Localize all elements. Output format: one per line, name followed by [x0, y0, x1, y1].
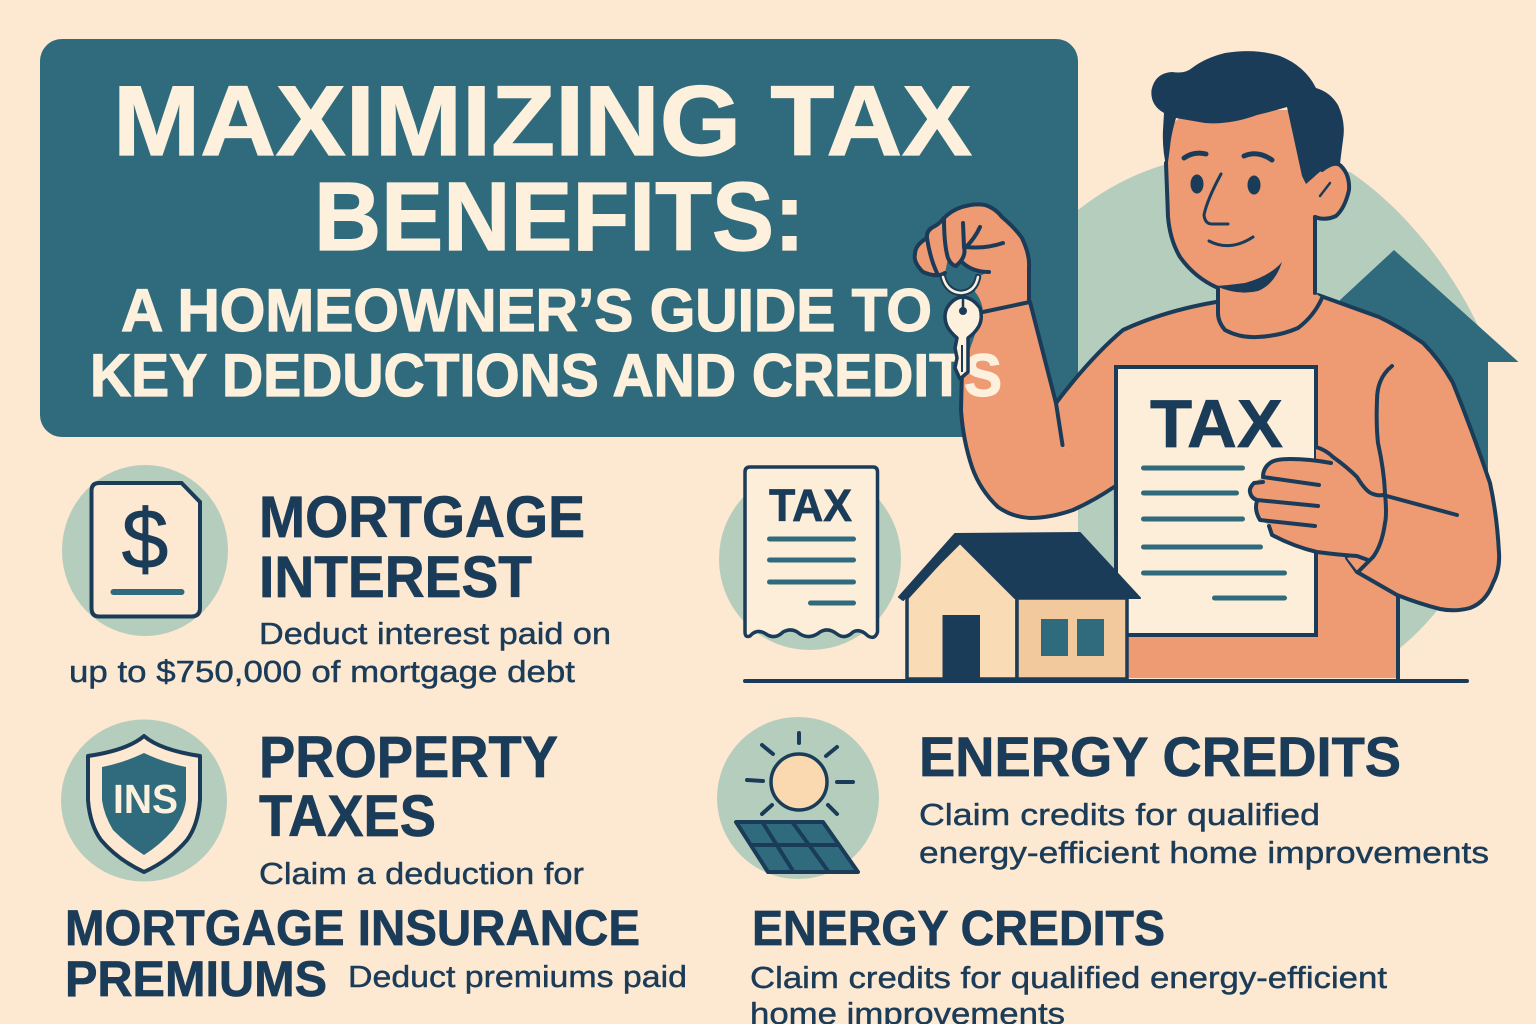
title panel background	[40, 39, 1078, 437]
right wall	[1017, 598, 1127, 679]
section: energy credits upper	[717, 717, 1489, 879]
heading: PROPERTY	[259, 725, 558, 790]
eyebrows	[1184, 153, 1272, 160]
sleeve line	[1358, 366, 1392, 572]
description: Claim a deduction for	[259, 856, 584, 891]
description: Deduct premiums paid	[348, 959, 687, 994]
section: energy credits lower	[750, 902, 1387, 1024]
description: Deduct interest paid on	[259, 616, 611, 651]
paper	[1116, 367, 1316, 635]
neck and face	[1164, 110, 1322, 337]
ear inner line	[1320, 183, 1330, 196]
title line 2: BENEFITS:	[314, 162, 805, 271]
small tax receipt illustration	[719, 467, 901, 650]
forearm line	[1316, 447, 1457, 515]
receipt lines	[767, 536, 856, 606]
heading: MORTGAGE INSURANCE	[65, 900, 640, 956]
teal house silhouette behind person	[1340, 250, 1518, 480]
icon: sun and solar panel	[717, 717, 879, 879]
receipt paper	[745, 467, 878, 637]
subtitle line 2: KEY DEDUCTIONS AND CREDITS	[90, 342, 1002, 409]
subtitle line 1: A HOMEOWNER’S GUIDE TO	[121, 277, 932, 344]
title heading	[90, 65, 1002, 409]
icon: shield	[61, 720, 227, 882]
icon: dollar document	[62, 465, 228, 636]
heading line 2: INTEREST	[259, 545, 532, 610]
hand outline	[1250, 459, 1368, 560]
nose	[1204, 174, 1228, 224]
wrist cuff	[983, 302, 1030, 312]
section: property taxes	[61, 720, 584, 891]
section: mortgage insurance premiums	[65, 900, 687, 1007]
ground line	[743, 679, 1469, 683]
text lines	[1141, 466, 1287, 600]
person body and arms	[961, 295, 1499, 680]
heading line 2: PREMIUMS	[65, 951, 327, 1007]
person head	[1151, 51, 1349, 337]
fist	[915, 204, 1030, 312]
description line 2: energy-efficient home improvements	[919, 835, 1489, 870]
ear	[1312, 164, 1349, 219]
windows	[1041, 619, 1104, 656]
smile	[1209, 237, 1253, 246]
description: Claim credits for qualified energy-efficient	[750, 960, 1387, 995]
icon: dollar document: $	[122, 492, 168, 586]
right hand gripping document	[1250, 366, 1457, 572]
forearm and hand fill	[1251, 447, 1385, 572]
heading: ENERGY CREDITS	[752, 902, 1165, 956]
hair	[1151, 51, 1344, 184]
title line 1: MAXIMIZING TAX	[113, 65, 972, 176]
left wall	[907, 540, 1017, 679]
torso	[1057, 295, 1499, 678]
heading: ENERGY CREDITS	[919, 725, 1401, 788]
heading: MORTGAGE	[259, 485, 585, 550]
description: Claim credits for qualified	[919, 797, 1320, 832]
receipt label TAX: TAX	[769, 480, 852, 531]
paper label TAX: TAX	[1150, 386, 1283, 462]
key hole	[962, 298, 964, 310]
roof	[899, 533, 1140, 600]
chin shadow	[1216, 262, 1282, 293]
tax document held by person	[1116, 367, 1316, 635]
description line 2: up to $750,000 of mortgage debt	[69, 654, 575, 689]
raised arm	[961, 302, 1113, 518]
mint background circle behind person	[1030, 163, 1488, 648]
arm outlines	[1056, 302, 1216, 403]
icon: shield: INS	[113, 776, 178, 822]
eyes	[1190, 174, 1260, 194]
small house illustration	[899, 533, 1140, 679]
mint circle behind receipt	[719, 468, 901, 650]
key ring	[943, 277, 978, 293]
raised hand holding key	[915, 204, 1030, 379]
key	[945, 297, 981, 379]
door	[942, 615, 980, 679]
fingers	[927, 218, 1003, 273]
heading line 2: TAXES	[259, 784, 436, 849]
section: mortgage interest	[62, 465, 611, 689]
